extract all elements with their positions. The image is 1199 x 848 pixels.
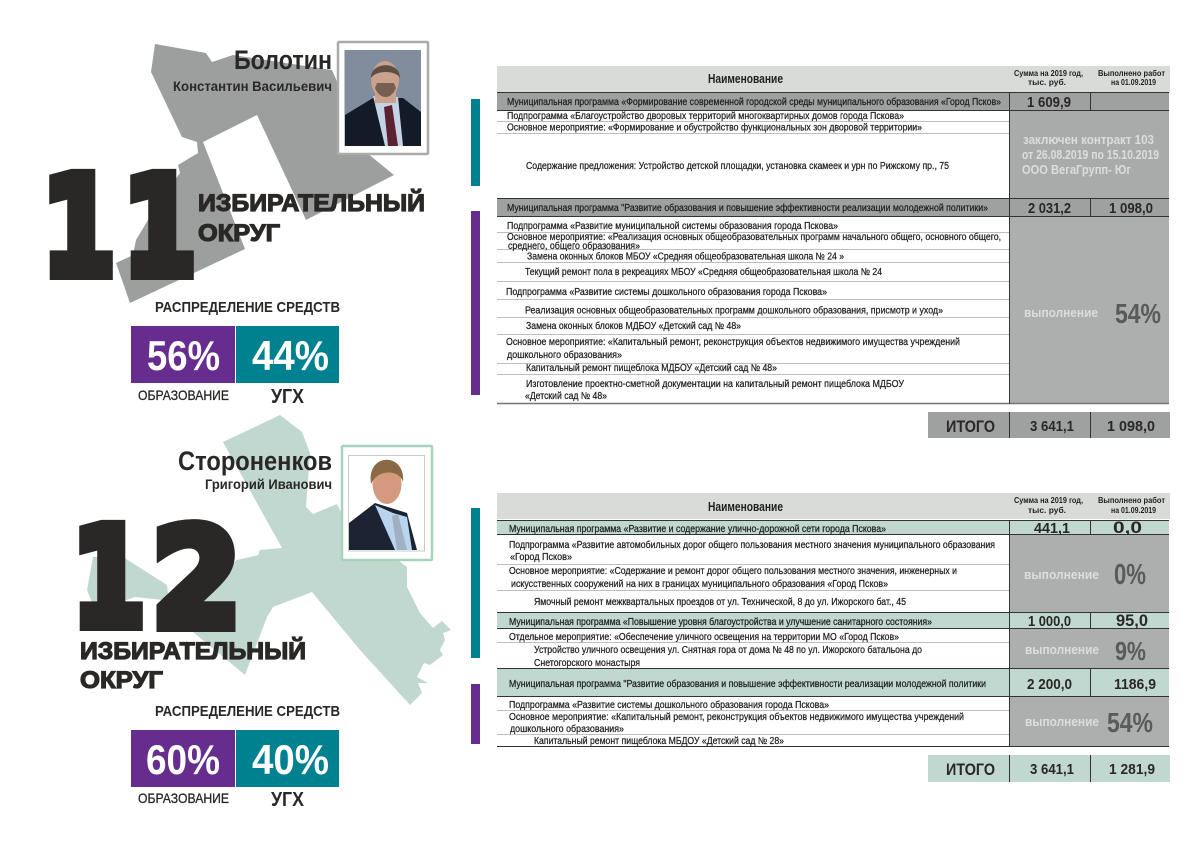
row texts: образование: Текущий ремонт пола в рекреациях МБОУ «Средняя общеобразовательная школа № 24 (525, 266, 882, 278)
programme row: образование (497, 668, 1169, 697)
share: образование 56%: ОБРАЗОВАНИЕ (138, 387, 229, 403)
table header: тыс. руб. (1028, 505, 1066, 515)
row texts: образование: Реализация основных общеобразовательных программ дошкольного образования, присмотр и уход» (525, 304, 943, 316)
share: образование 56% (131, 326, 235, 403)
programme row: городская среда: Муниципальная программа «Формирование современной городской среды муниципального образования «Город Псков» (507, 96, 1001, 108)
table: district 12 programmes (497, 493, 1170, 782)
label: избирательный округ (198, 189, 425, 247)
programme row: дорожная сеть: Муниципальная программа «Развитие и содержание улично-дорожной сети города Пскова» (509, 524, 886, 535)
big number: 11: 1 (123, 148, 196, 306)
programme row: дорожная сеть (497, 518, 1169, 537)
row texts: благоустройство: Основное мероприятие: «Формирование и обустройство функциональных зон дворовой территории» (507, 122, 922, 134)
table header: тыс. руб. (1028, 77, 1066, 87)
programme row: образование: 2 031,2 (1028, 200, 1071, 217)
status panel: выполнение 0% (1009, 535, 1169, 612)
column dividers (1010, 92, 1090, 404)
status panel: выполнение 54%: 54% (1107, 707, 1153, 738)
totals row: ИТОГО (946, 760, 995, 779)
status panel: выполнение 9% (1009, 629, 1169, 668)
share: образование 60%: 60% (146, 736, 220, 783)
row texts: дорожная сеть: Основное мероприятие: «Содержание и ремонт дорог общего пользования местного значения, инженерных и (509, 565, 957, 577)
programme row: образование: 2 200,0 (1027, 676, 1072, 693)
row texts: образование (497, 220, 1169, 404)
row texts: образование: «Детский сад № 48» (525, 391, 607, 402)
status panel: контракт: от 26.08.2019 по 15.10.2019 (1022, 147, 1159, 162)
row texts: образование: дошкольного образования» (510, 723, 624, 735)
heading: распределение средств: РАСПРЕДЕЛЕНИЕ СРЕДСТВ (155, 703, 340, 720)
row texts: образование: Основное мероприятие: «Капитальный ремонт, реконструкция объектов недвижимого имущества учреждений (506, 336, 960, 348)
share: УГХ 40% (236, 730, 339, 811)
row texts: дорожная сеть: Подпрограмма «Развитие автомобильных дорог общего пользования местного значения муниципального образования (509, 539, 995, 551)
row texts: образование: среднего, общего образования» (508, 240, 640, 252)
programme row: благоустройство (497, 611, 1169, 630)
label: избирательный округ: ОКРУГ (80, 667, 163, 694)
share: УГХ 44%: УГХ (271, 386, 305, 408)
map: district 11 (116, 44, 394, 303)
status panel: выполнение 0%: 0% (1114, 559, 1146, 591)
big number: 11: 1 (42, 148, 115, 306)
name: Болотин: Болотин (234, 45, 332, 75)
row texts: образование: Изготовление проектно-сметной документации на капитальный ремонт пищеблока МДБОУ (526, 378, 905, 390)
marker: teal bar table 1 (471, 99, 480, 186)
status panel: контракт (1009, 111, 1169, 198)
row texts: дорожная сеть (497, 539, 1009, 608)
status panel: выполнение 0%: выполнение (1024, 567, 1099, 582)
table header: Сумма на 2019 год, (1014, 495, 1083, 505)
totals row: ИТОГО (946, 417, 995, 436)
share: УГХ 40%: 40% (252, 736, 329, 783)
row texts: дорожная сеть: Ямочный ремонт межквартальных проездов от ул. Технической, 8 до ул. Ижорского бат., 45 (534, 596, 906, 608)
totals row: 3 641,1 (1030, 761, 1074, 778)
status panel: выполнение 54% (1009, 697, 1169, 746)
row texts: образование: Замена оконных блоков МДБОУ «Детский сад № 48» (526, 320, 741, 332)
programme row: городская среда: 1 609,9 (1027, 94, 1071, 111)
table header: Выполнено работ (1098, 68, 1165, 78)
subname: Константин Васильевич: Константин Васильевич (173, 78, 332, 94)
share: образование 60%: ОБРАЗОВАНИЕ (138, 790, 229, 806)
programme row: благоустройство: 1 000,0 (1028, 613, 1071, 630)
table header: Выполнено работ (1098, 495, 1165, 505)
subname: Григорий Иванович: Григорий Иванович (205, 476, 332, 492)
share: УГХ 44% (236, 326, 339, 408)
row texts: образование: Основное мероприятие: «Реализация основных общеобразовательных программ начального общего, основного общего, (507, 231, 1001, 243)
row texts: образование: Основное мероприятие: «Капитальный ремонт, реконструкция объектов недвижимого имущества учреждений (509, 711, 964, 723)
programme row: дорожная сеть: 0,0 (1113, 518, 1142, 537)
status panel: контракт: ООО ВегаГрупп- Юг (1022, 162, 1131, 177)
label: избирательный округ: ИЗБИРАТЕЛЬНЫЙ (198, 189, 425, 217)
big number: 12 (72, 499, 241, 659)
table header: на 01.09.2019 (1111, 77, 1156, 87)
totals row: 1 098,0 (1107, 418, 1155, 435)
status panel: контракт: заключен контракт 103 (1023, 132, 1154, 147)
name: Стороненков: Стороненков (178, 446, 332, 476)
programme row: благоустройство: Муниципальная программа «Повышение уровня благоустройства и улучшение санитарного состояния» (509, 616, 932, 628)
table header: на 01.09.2019 (1111, 505, 1156, 515)
row texts: дорожная сеть: «Город Псков» (510, 552, 572, 563)
label: избирательный округ (80, 637, 306, 694)
panel: district 12 summary (72, 415, 451, 811)
row texts: благоустройство: Содержание предложения: Устройство детской площадки, установка скамеек и урн по Рижскому пр., 75 (526, 161, 949, 172)
row texts: освещение (497, 631, 1009, 669)
share: образование 60% (131, 730, 235, 806)
share: образование 56%: 56% (147, 332, 220, 379)
status panel: выполнение 54% (1009, 217, 1169, 403)
big number: 12: 2 (152, 500, 241, 659)
marker: purple bar table 2 (471, 684, 480, 744)
totals row (928, 412, 1170, 438)
table header (497, 66, 1170, 92)
row texts: образование (497, 699, 1169, 747)
row texts: благоустройство (497, 111, 1009, 172)
big number: 11 (42, 148, 196, 306)
status panel: выполнение 54%: выполнение (1024, 305, 1098, 320)
programme row: благоустройство: 95,0 (1116, 611, 1148, 630)
totals row: 3 641,1 (1030, 418, 1074, 435)
map: district 12 (87, 415, 451, 705)
portrait: Болотин (338, 42, 428, 154)
row texts: образование: Капитальный ремонт пищеблока МДБОУ «Детский сад № 48» (526, 362, 777, 374)
label: избирательный округ: ОКРУГ (198, 220, 280, 247)
row texts: образование: Подпрограмма «Развитие системы дошкольного образования города Пскова» (506, 286, 827, 298)
marker: purple bar table 1 (471, 211, 480, 395)
table: district 11 programmes (497, 66, 1170, 438)
status panel: выполнение 54%: выполнение (1025, 714, 1099, 729)
status panel: выполнение 9%: выполнение (1025, 642, 1099, 657)
row texts: образование: Подпрограмма «Развитие муниципальной системы образования города Пскова» (507, 220, 838, 232)
share: УГХ 44%: 44% (252, 332, 329, 379)
share: УГХ 40%: УГХ (271, 789, 305, 811)
totals row (928, 755, 1170, 782)
row texts: освещение: Снетогорского монастыря (534, 658, 640, 669)
row texts: образование: Подпрограмма «Развитие системы дошкольного образования города Пскова» (509, 699, 829, 711)
totals row: 1 281,9 (1109, 761, 1155, 778)
table header: Сумма на 2019 год, (1014, 68, 1083, 78)
big number: 12: 1 (72, 499, 145, 657)
row texts: благоустройство: Подпрограмма «Благоустройство дворовых территорий многоквартирных домов города Пскова» (507, 111, 904, 122)
programme row: образование (497, 198, 1169, 217)
label: избирательный округ: ИЗБИРАТЕЛЬНЫЙ (80, 637, 306, 665)
programme row: образование: 1186,9 (1114, 676, 1156, 693)
row texts: образование: Капитальный ремонт пищеблока МБДОУ «Детский сад № 28» (534, 735, 784, 747)
table header: Наименование (708, 499, 783, 514)
row texts: дорожная сеть: искусственных сооружений на них в границах муниципального образования «Город Псков» (511, 578, 888, 590)
row texts: освещение: Устройство уличного освещения ул. Снятная гора от дома № 48 по ул. Ижорского батальона до (534, 644, 922, 656)
programme row: образование: 1 098,0 (1109, 200, 1153, 217)
status panel: выполнение 54%: 54% (1115, 298, 1161, 329)
status panel: выполнение 9%: 9% (1115, 636, 1146, 666)
row texts: образование: дошкольного образования» (507, 349, 622, 361)
column dividers (1010, 520, 1090, 747)
programme row: городская среда (497, 92, 1169, 111)
row texts: образование: Замена оконных блоков МБОУ «Средняя общеобразовательная школа № 24 » (527, 250, 844, 262)
marker: teal bar table 2 (471, 508, 480, 658)
table header (497, 493, 1170, 519)
programme row: дорожная сеть: 441,1 (1034, 520, 1070, 537)
panel: district 11 summary (42, 42, 428, 408)
table header: Наименование (708, 71, 783, 86)
programme row: образование: Муниципальная программа "Развитие образования и повышение эффективности реализации молодежной политики (509, 678, 986, 690)
programme row: образование: Муниципальная программа "Развитие образования и повышение эффективности реализации молодежной политики» (507, 202, 988, 214)
row texts: освещение: Отдельное мероприятие: «Обеспечение уличного освещения на территории МО «Город Псков» (509, 631, 899, 643)
portrait: Стороненков (342, 446, 432, 560)
heading: распределение средств: РАСПРЕДЕЛЕНИЕ СРЕДСТВ (155, 299, 340, 316)
